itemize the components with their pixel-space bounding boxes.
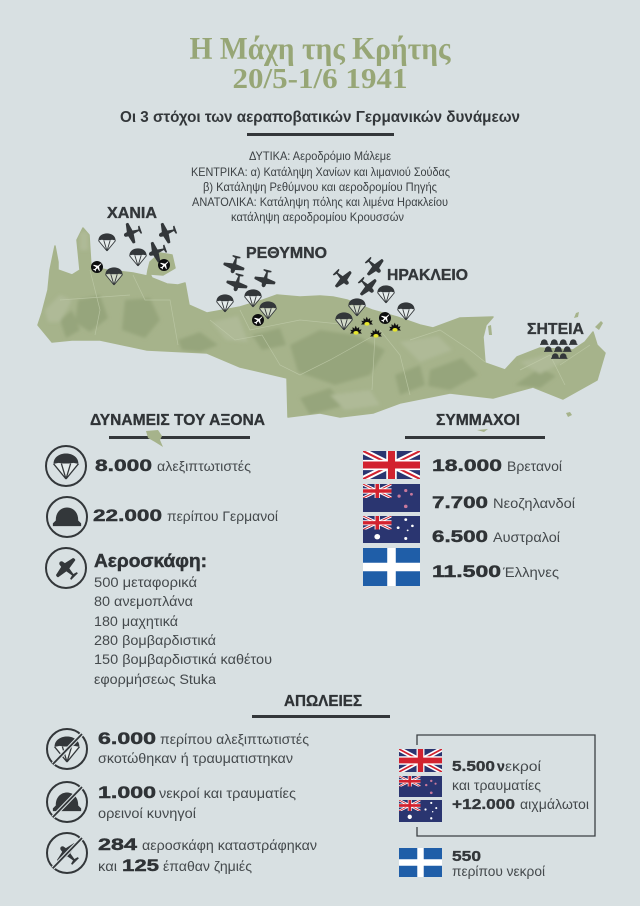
allies row: British — [363, 451, 562, 479]
axis row: paratroopers: 8.000 — [95, 456, 152, 475]
icons: Chania attack — [91, 219, 179, 285]
losses row: mountain troops — [47, 782, 297, 822]
axis row: paratroopers — [46, 446, 252, 486]
title: Η Μάχη της Κρήτης — [190, 30, 451, 66]
losses row: paratroopers: περίπου αλεξιπτωτιστές — [160, 732, 309, 747]
heading: losses — [252, 693, 390, 718]
axis row: paratroopers: αλεξιπτωτιστές — [157, 459, 252, 474]
heading: losses: ΑΠΩΛΕΙΕΣ — [284, 693, 362, 710]
axis row: soldiers: περίπου Γερμανοί — [167, 509, 278, 524]
objectives text block: κατάληψη αεροδρομίου Κρουσσών — [231, 210, 404, 224]
allied losses text: αιχμάλωτοι — [520, 797, 589, 812]
allies row: British: 18.000 — [432, 456, 502, 475]
losses row: paratroopers — [47, 729, 309, 769]
losses row: aircraft: και — [98, 859, 117, 874]
objectives text block: ΑΝΑΤΟΛΙΚΑ: Κατάληψη πόλης και λιμένα Ηρακλείου — [192, 195, 448, 209]
allied losses text: +12.000 — [452, 797, 515, 813]
objectives text block — [191, 149, 450, 224]
axis row: aircraft: 150 βομβαρδιστικά καθέτου — [94, 652, 272, 667]
allied losses text: 5.500 — [452, 759, 495, 775]
losses row: aircraft: έπαθαν ζημιές — [163, 859, 253, 874]
losses row: aircraft: αεροσκάφη καταστράφηκαν — [142, 838, 317, 853]
Greek losses — [399, 848, 545, 879]
allied losses text: ν — [497, 758, 505, 774]
allies row: New Zealanders: Νεοζηλανδοί — [493, 496, 575, 511]
icons: Sitia helmets — [540, 339, 577, 359]
allies row: British: Βρετανοί — [507, 459, 562, 474]
label: Chania: ΧΑΝΙΑ — [107, 205, 157, 222]
objectives text block: ΔΥΤΙΚΑ: Αεροδρόμιο Μάλεμε — [249, 149, 392, 163]
label: Rethymno: ΡΕΘΥΜΝΟ — [246, 245, 327, 262]
heading: Axis forces — [90, 412, 265, 447]
flag: New Zealand — [399, 776, 442, 797]
heading: Axis forces: ΔΥΝΑΜΕΙΣ ΤΟΥ ΑΞΟΝΑ — [90, 412, 265, 429]
axis row: aircraft — [46, 548, 272, 687]
small islands — [477, 312, 603, 432]
map of Crete — [38, 228, 605, 417]
allies row: Australians — [363, 516, 560, 546]
axis row: aircraft: Αεροσκάφη: — [94, 551, 207, 571]
axis row: aircraft: εφορμήσεως Stuka — [94, 672, 217, 687]
flag: UK — [399, 749, 442, 772]
label: Heraklion: ΗΡΑΚΛΕΙΟ — [387, 267, 468, 284]
heading: Allies: ΣΥΜΜΑΧΟΙ — [436, 412, 520, 429]
losses row: aircraft: 284 — [98, 835, 138, 854]
axis row: soldiers: 22.000 — [93, 506, 162, 525]
losses row: mountain troops: 1.000 — [98, 783, 156, 802]
Greek losses: 550 — [452, 849, 481, 865]
losses row: aircraft: 125 — [122, 856, 159, 875]
label: Sitia: ΣΗΤΕΙΑ — [527, 321, 584, 338]
objectives text block: β) Κατάληψη Ρεθύμνου και αεροδρομίου Πηγής — [203, 180, 437, 194]
flag: Australia — [399, 800, 442, 822]
axis row: aircraft: 500 μεταφορικά — [94, 575, 197, 590]
allies row: Australians: 6.500 — [432, 527, 488, 546]
losses row: paratroopers: 6.000 — [98, 729, 156, 748]
heading: Allies — [405, 412, 545, 439]
allies row: New Zealanders: 7.700 — [432, 493, 488, 512]
axis row: aircraft: 180 μαχητικά — [94, 614, 178, 629]
losses row: mountain troops: νεκροί και τραυματίες — [159, 786, 297, 801]
losses row: paratroopers: σκοτώθηκαν ή τραυματιστηκαν — [98, 751, 293, 766]
allied losses text: και τραυματίες — [452, 778, 542, 793]
icons: Rethymno attack — [216, 253, 278, 326]
icons: Heraklion attack — [328, 252, 415, 338]
axis row: soldiers — [47, 497, 278, 537]
axis row: aircraft: 280 βομβαρδιστικά — [94, 633, 216, 648]
allies row: Greeks — [363, 548, 560, 586]
subtitle: Οι 3 στόχοι των αεραποβατικών Γερμανικών δυνάμεων — [120, 109, 520, 126]
allies row: New Zealanders — [363, 484, 575, 512]
allies row: Greeks: 11.500 — [432, 562, 501, 581]
Greek losses: περίπου νεκροί — [452, 864, 545, 879]
title — [190, 30, 451, 95]
losses row: aircraft — [47, 833, 317, 875]
objectives text block: ΚΕΝΤΡΙΚΑ: α) Κατάληψη Χανίων και λιμανιού Σούδας — [191, 165, 450, 179]
axis row: aircraft: 80 ανεμοπλάνα — [94, 594, 193, 609]
losses row: mountain troops: ορεινοί κυνηγοί — [98, 806, 196, 821]
allies row: Australians: Αυστραλοί — [493, 530, 560, 545]
title: 20/5-1/6 1941 — [232, 63, 408, 95]
allied losses text: εκροί — [505, 759, 541, 774]
allied losses text — [452, 758, 589, 813]
allies row: Greeks: Έλληνες — [502, 565, 560, 580]
allied losses box — [399, 735, 595, 836]
